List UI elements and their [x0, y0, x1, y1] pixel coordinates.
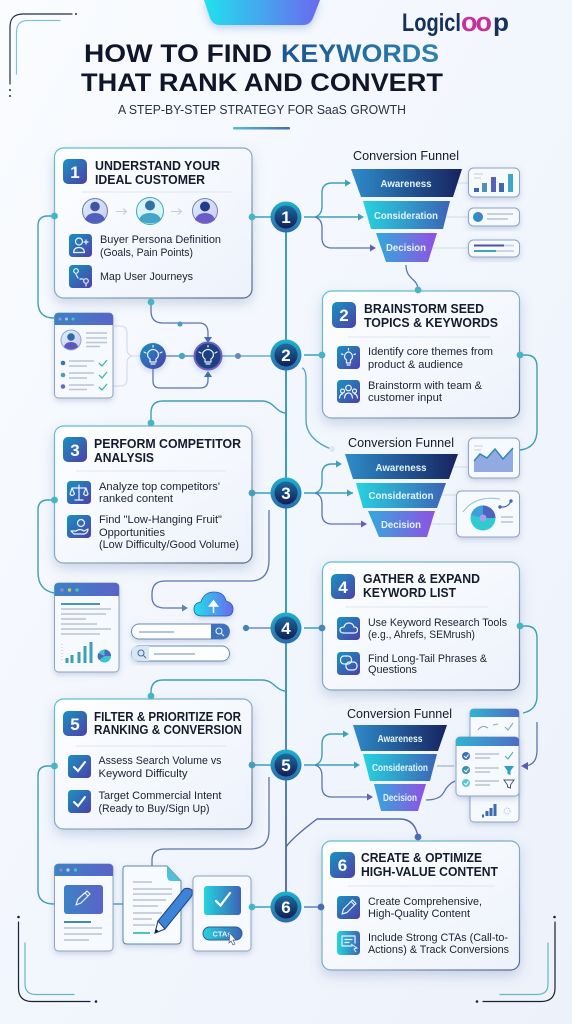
badge 3: 3 [70, 441, 80, 460]
consideration stage: Consideration [372, 762, 428, 774]
card 4 [322, 562, 520, 690]
heading 1: UNDERSTAND YOUR [95, 158, 221, 173]
title: THAT RANK AND CONVERT [81, 69, 443, 97]
timeline node 4 [270, 612, 302, 644]
awareness stage: Awareness [380, 178, 432, 190]
timeline node 6 [270, 892, 302, 922]
badge 5 [63, 711, 87, 736]
search bar 1 [132, 624, 230, 639]
timeline node 2: 2 [281, 346, 291, 365]
item: long tail: Find Long-Tail Phrases & [368, 653, 487, 665]
timeline node 5 [270, 750, 302, 780]
search bar 2 [132, 646, 230, 661]
timeline node 5: 5 [281, 756, 291, 775]
badge 4: 4 [338, 578, 348, 597]
item: search volume: Keyword Difficulty [98, 768, 188, 780]
consideration stage: Consideration [374, 210, 438, 222]
mini panel: pie [468, 208, 520, 226]
consideration stage: Consideration [368, 490, 434, 502]
heading 1 [95, 158, 221, 187]
check box [204, 886, 241, 915]
item: long tail: Questions [368, 664, 417, 676]
item: commercial intent: (Ready to Buy/Sign Up) [98, 803, 210, 815]
connectors: steps 3 and 4 on the left [38, 493, 272, 631]
item: search volume: Assess Search Volume vs [98, 755, 222, 767]
badge 1 [63, 159, 87, 184]
funnel title: Conversion Funnel [347, 707, 452, 721]
title [81, 40, 443, 97]
badge 5: 5 [70, 715, 80, 734]
item: research tools: (e.g., Ahrefs, SEMrush) [368, 629, 475, 641]
item: analyze competitors: ranked content [99, 493, 174, 505]
item: low hanging fruit: (Low Difficulty/Good Volume) [99, 539, 239, 551]
item: low hanging fruit [67, 514, 239, 551]
timeline node 6: 6 [281, 898, 291, 917]
heading 4 [363, 571, 480, 600]
logo: oo [461, 7, 491, 37]
top tab [204, 0, 320, 25]
logo: Logicl [402, 9, 461, 37]
card 2 left connector [304, 354, 322, 356]
connector: step 2 to funnel 2 [302, 355, 537, 452]
timeline node 3: 3 [281, 484, 291, 503]
decision stage: Decision [381, 519, 421, 531]
item: commercial intent [68, 790, 222, 815]
report panel [54, 583, 119, 672]
timeline node 1 [270, 202, 302, 232]
heading 5: FILTER & PRIORITIZE FOR [94, 709, 242, 724]
decision stage: Decision [383, 792, 417, 804]
item: low hanging fruit: Opportunities [99, 527, 165, 539]
card 5 [54, 699, 252, 829]
document with pencil [123, 866, 192, 944]
item: brainstorm team: customer input [368, 392, 443, 404]
timeline node 4: 4 [281, 619, 291, 638]
logo [402, 7, 509, 37]
connectors: step 1 to 2 on the left [38, 216, 272, 388]
item: strong CTAs: Actions) & Track Conversions [368, 944, 509, 956]
funnel 3 [347, 707, 452, 811]
heading 5: RANKING & CONVERSION [94, 722, 242, 737]
badge 6 [330, 852, 355, 878]
decision stage: Decision [386, 242, 426, 254]
item: research tools: Use Keyword Research Tools [368, 617, 507, 629]
timeline node 1: 1 [281, 208, 291, 227]
item: create content: High-Quality Content [368, 908, 471, 920]
connector: central line to card 3 [151, 401, 286, 423]
mini panel: area chart [468, 438, 520, 478]
editor panel [54, 864, 113, 951]
item: core themes: Identify core themes from [368, 346, 493, 358]
title divider [233, 127, 290, 130]
heading 2: BRAINSTORM SEED [364, 301, 484, 316]
funnel 2 connectors [304, 460, 468, 528]
item: research tools [337, 617, 507, 641]
item: low hanging fruit: Find "Low-Hanging Fruit" [99, 514, 222, 526]
funnel 2 [345, 436, 458, 537]
badge 1: 1 [70, 163, 80, 182]
item: user journeys [69, 265, 193, 288]
mini panel: bars [468, 168, 520, 197]
bulb node: idea [140, 343, 166, 369]
funnel title: Conversion Funnel [353, 149, 459, 163]
card 3 [54, 426, 252, 563]
heading 4: KEYWORD LIST [363, 585, 456, 600]
mini panel: pie and trend [456, 491, 520, 537]
central timeline [285, 217, 287, 907]
stacked checklist panels [456, 709, 519, 822]
mini panel: progress [468, 240, 520, 257]
heading 2: TOPICS & KEYWORDS [364, 315, 498, 330]
heading 3 [94, 436, 242, 465]
back panel [470, 709, 519, 822]
heading 1: IDEAL CUSTOMER [95, 172, 206, 187]
connector: central line to card 5 [151, 680, 286, 696]
corner decoration: top left [9, 13, 77, 97]
card 6 [322, 841, 520, 970]
heading 6: CREATE & OPTIMIZE [361, 850, 482, 865]
item: user journeys: Map User Journeys [100, 271, 193, 283]
corner decoration: bottom right [476, 916, 556, 1003]
item: search volume [68, 755, 222, 780]
persona checklist panel [54, 313, 113, 398]
subtitle: A STEP-BY-STEP STRATEGY FOR SaaS GROWTH [118, 102, 406, 117]
item: analyze competitors: Analyze top competitors' [99, 481, 220, 493]
card 6 left connector [304, 906, 321, 908]
badge 3 [63, 437, 87, 462]
item: analyze competitors [67, 481, 220, 505]
item: buyer persona [69, 234, 221, 259]
item: strong CTAs: Include Strong CTAs (Call-to- [368, 932, 508, 944]
persona flow [82, 198, 218, 224]
badge 2 [332, 302, 356, 328]
awareness stage: Awareness [378, 733, 423, 745]
awareness stage: Awareness [376, 462, 427, 474]
funnel 1 connectors [304, 180, 468, 290]
item: long tail [337, 652, 487, 676]
item: strong CTAs [337, 931, 509, 956]
heading 5 [94, 709, 242, 737]
CTA button: CTAs [212, 930, 232, 938]
heading 4: GATHER & EXPAND [363, 571, 480, 586]
front panel [456, 737, 519, 796]
connectors: step 5 and 6 on the left [38, 765, 272, 907]
item: core themes: product & audience [368, 359, 463, 371]
funnel 3 connectors [304, 730, 455, 800]
connector: central line to card 6 [286, 819, 418, 847]
badge 2: 2 [339, 306, 349, 325]
funnel title: Conversion Funnel [348, 436, 454, 450]
card 2 [322, 291, 520, 418]
item: brainstorm team: Brainstorm with team & [368, 380, 482, 392]
item: commercial intent: Target Commercial Intent [98, 790, 222, 802]
title: KEYWORDS [281, 40, 439, 68]
card 1 [54, 148, 252, 298]
cloud upload icon [194, 592, 233, 616]
item: brainstorm team [337, 380, 482, 404]
heading 2 [364, 301, 498, 330]
item: core themes [337, 346, 493, 371]
funnel 1 [351, 149, 462, 262]
item: buyer persona: (Goals, Pain Points) [100, 247, 193, 259]
item: create content [337, 896, 482, 920]
item: create content: Create Comprehensive, [368, 896, 482, 908]
connector dots on card edges [51, 213, 523, 910]
heading 6: HIGH-VALUE CONTENT [361, 864, 498, 879]
corner decoration: bottom left [17, 916, 97, 1003]
title: HOW TO FIND [84, 40, 272, 68]
heading 6 [361, 850, 498, 879]
heading 3: ANALYSIS [94, 450, 154, 465]
timeline node 2 [270, 340, 302, 370]
timeline node 3 [270, 478, 302, 508]
badge 4 [331, 574, 355, 599]
logo: p [493, 9, 509, 37]
CTA panel [193, 876, 251, 951]
bulb node: refined idea [194, 342, 222, 370]
badge 6: 6 [338, 856, 347, 875]
heading 3: PERFORM COMPETITOR [94, 436, 242, 451]
item: buyer persona: Buyer Persona Definition [100, 234, 221, 246]
card 4 connectors [304, 626, 537, 770]
